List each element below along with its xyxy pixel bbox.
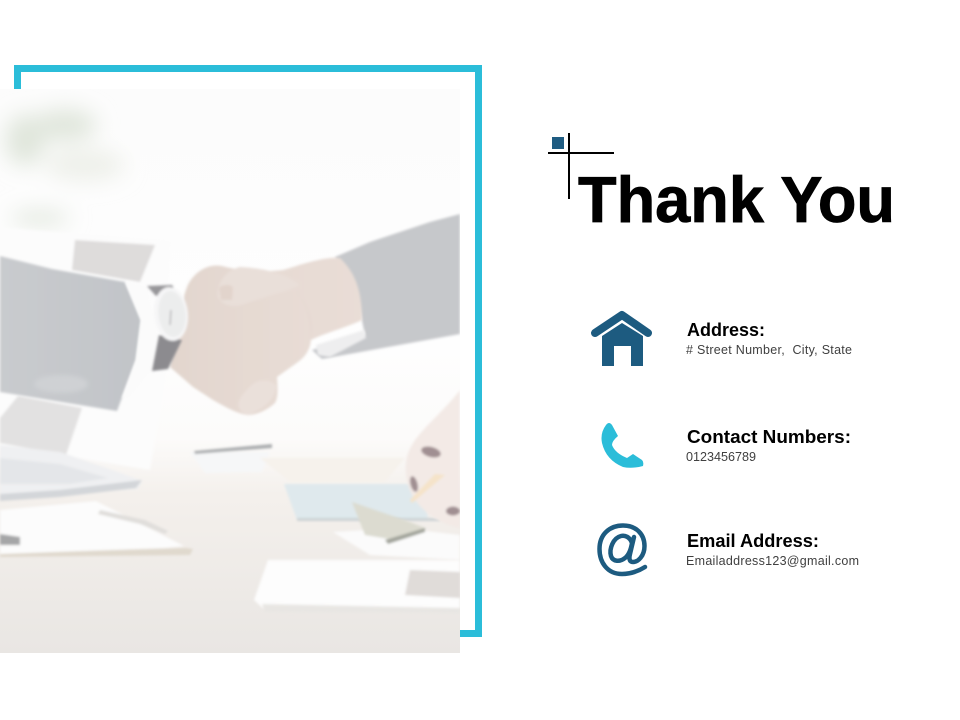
email text: Email Address: [687, 531, 819, 551]
icon: at sign [600, 526, 645, 574]
photo: handshake over a desk [0, 89, 460, 653]
right cuff and watch [316, 330, 366, 357]
papers and binder clip [333, 502, 460, 560]
left shirt cuff [122, 283, 142, 397]
blurred plant [5, 109, 125, 225]
address text: # Street Number, City, State [686, 343, 852, 357]
icon: house [595, 315, 648, 366]
wristwatch [147, 285, 191, 371]
sleeve buttons [42, 377, 86, 391]
contact numbers text: Contact Numbers: [687, 427, 851, 447]
contact numbers text [686, 427, 851, 464]
hand with pen [406, 390, 460, 528]
title: Thank You [578, 163, 895, 236]
blue tablet [284, 484, 440, 521]
white device [254, 560, 460, 613]
address text [686, 320, 852, 357]
address text: Address: [687, 320, 765, 340]
title accent: cross and square [548, 133, 614, 199]
cyan frame [14, 65, 482, 637]
right sleeve [312, 214, 460, 359]
pens and papers on the desk [193, 442, 400, 462]
clipboard [0, 501, 193, 557]
left sleeve [0, 256, 141, 411]
laptop [0, 239, 155, 502]
icon: phone [602, 423, 643, 468]
contact numbers text: 0123456789 [686, 450, 756, 464]
email text: Emailaddress123@gmail.com [686, 554, 859, 568]
email text [686, 531, 859, 568]
clasped hands [170, 258, 362, 415]
